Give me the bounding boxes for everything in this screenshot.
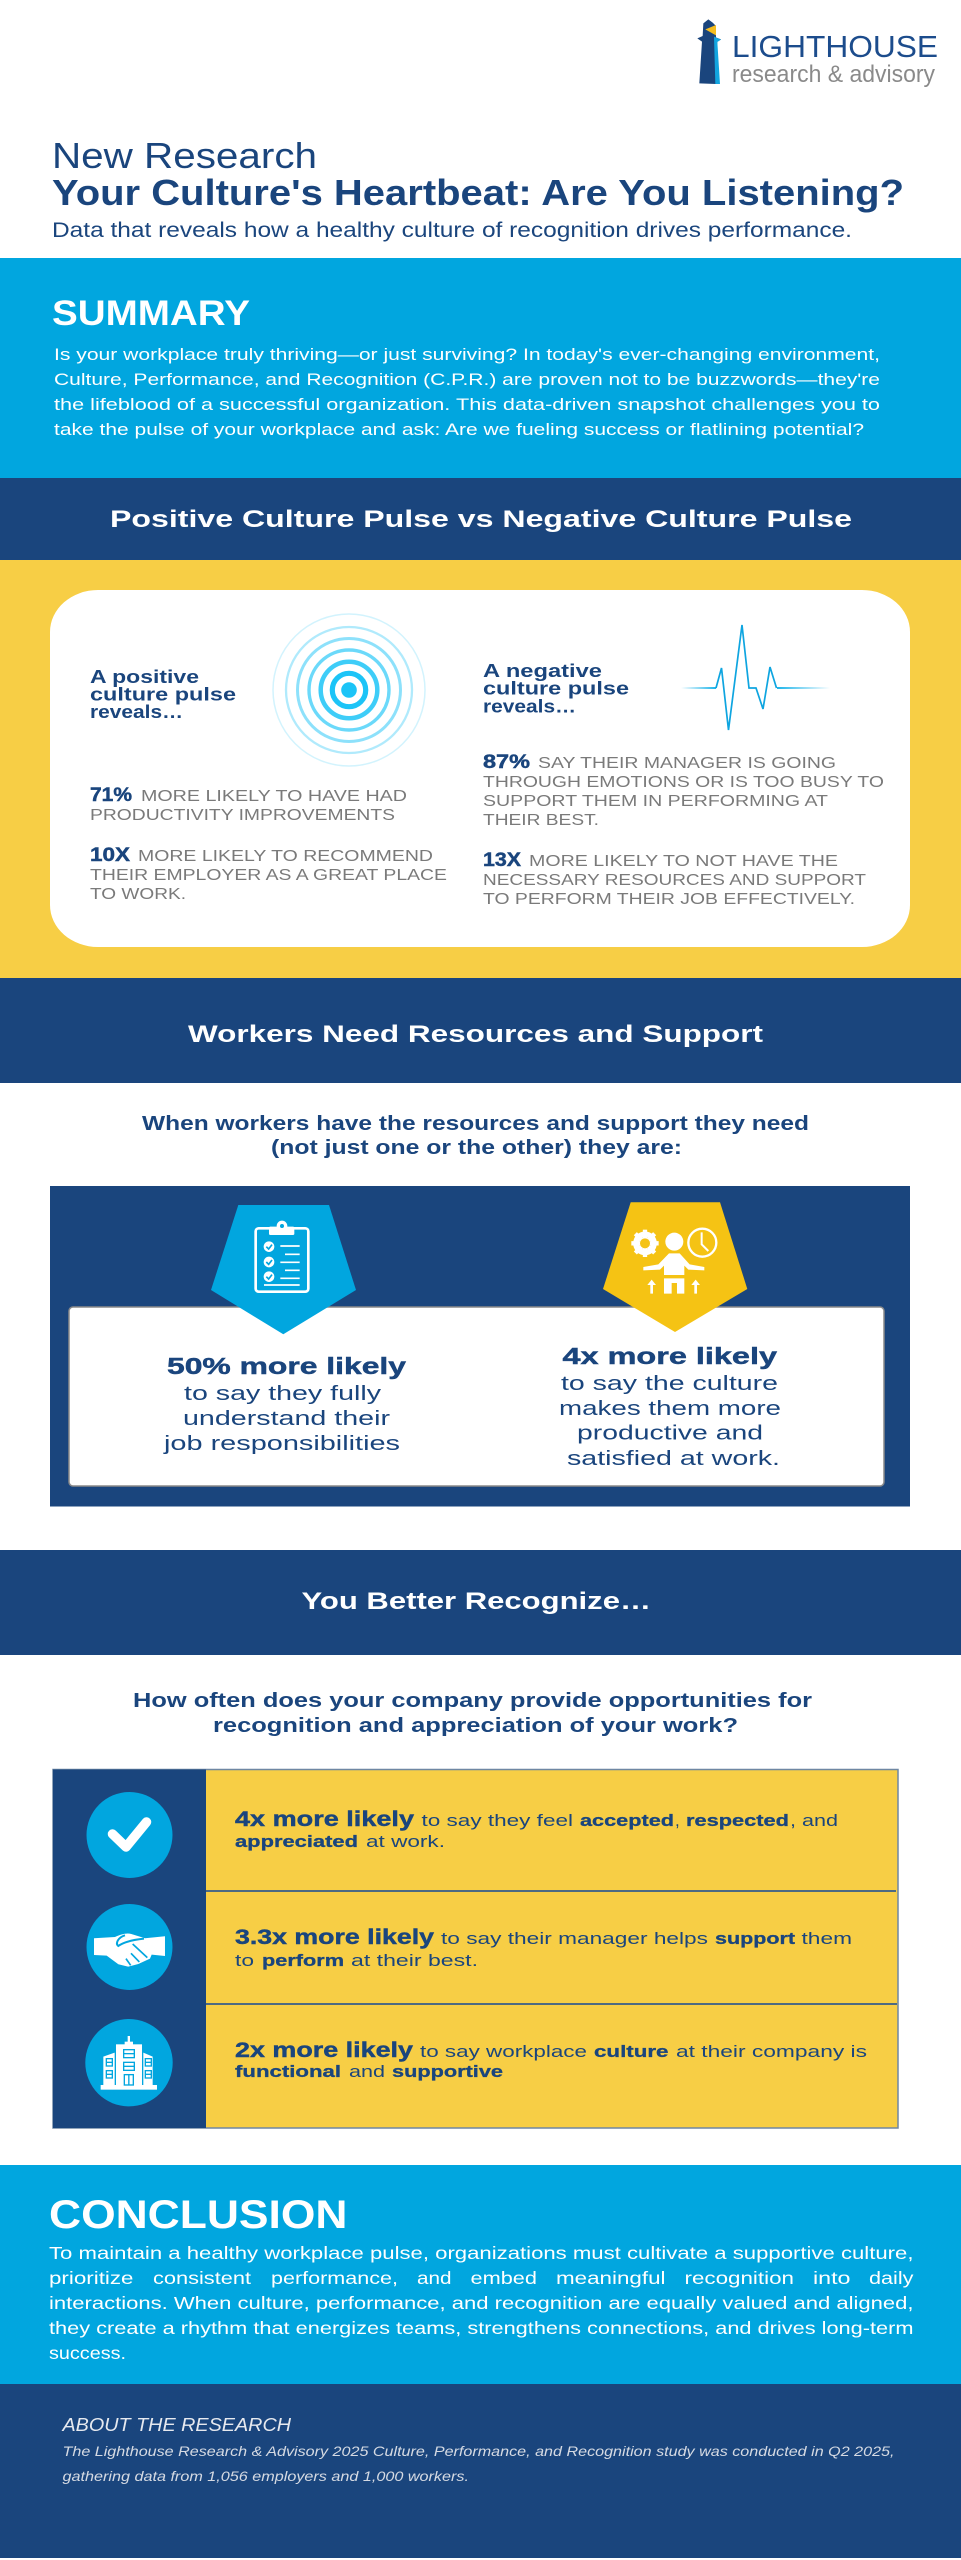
stat: 71%: 71% [90,785,132,806]
section band: positive vs negative pulse [0,478,961,560]
section heading: You Better Recognize… [302,1588,651,1615]
panel: summary [0,258,961,478]
panel: about the research [0,2384,961,2558]
row 2 text: support [715,1929,795,1948]
conclusion text: interactions. When culture, performance, and recognition are equally valued and aligned, [49,2293,914,2313]
conclusion text [49,2243,914,2363]
subheading: resources and support: When workers have the resources and support they need [142,1112,809,1135]
stat: 71% [90,785,407,824]
stat: 4x more likely: productive and [577,1422,763,1444]
stat: 13X: NECESSARY RESOURCES AND SUPPORT [483,872,867,889]
conclusion text: into [813,2268,850,2288]
stat: 71%: PRODUCTIVITY IMPROVEMENTS [90,807,395,824]
stat: 50% more likely: 50% more likely [167,1353,406,1379]
negative pulse heading [483,660,629,716]
icon: productive person badge [603,1202,747,1332]
positive pulse heading: A positive [90,666,199,687]
row 1 text: respected [686,1811,789,1830]
positive pulse heading [90,666,236,722]
stat: 50% more likely: to say they fully [184,1383,381,1405]
stat: 10X: MORE LIKELY TO RECOMMEND [138,848,433,865]
stat: 87%: 87% [483,752,530,773]
row 1 text: accepted [580,1811,674,1830]
row dividers [206,1890,896,1892]
eyebrow: New Research: New Research [52,135,317,176]
conclusion text: success. [49,2343,126,2363]
stat: 10X: 10X [90,845,130,866]
panel: resources and support stats [50,1186,910,1506]
panel: culture pulse comparison [0,560,961,978]
about text [62,2443,894,2484]
icon: lighthouse [697,19,721,84]
icon: concentric pulse rings [273,614,425,766]
negative pulse heading: A negative [483,660,602,681]
row 1 text: 4x more likely [235,1807,414,1831]
stat: 10X [90,845,447,903]
row 3 text: and [349,2062,385,2081]
panel: recognition table [53,1770,898,2128]
conclusion text: performance, [271,2268,398,2288]
stat: 50% more likely: understand their [183,1408,390,1430]
row 1 text: to say they feel [422,1811,573,1830]
stat: 4x more likely: 4x more likely [562,1343,777,1369]
stat: 87%: THEIR BEST. [483,812,599,829]
summary text: Is your workplace truly thriving—or just surviving? In today's ever-changing environment, [54,345,880,364]
subheading: recognition question: How often does your company provide opportunities for [133,1689,812,1712]
section heading: Workers Need Resources and Support [188,1021,763,1048]
stat: 4x more likely: to say the culture [561,1373,778,1395]
row 3 text: 2x more likely [235,2038,413,2062]
section band: workers need resources [0,978,961,1083]
stat: 13X [483,850,867,908]
stat: 87%: SAY THEIR MANAGER IS GOING [538,755,836,772]
negative pulse heading: culture pulse [483,678,629,698]
stat: 13X: TO PERFORM THEIR JOB EFFECTIVELY. [483,891,855,908]
panel: conclusion [0,2165,961,2384]
row 2 text: perform [262,1951,344,1970]
positive pulse heading: reveals… [90,701,183,722]
row 2 text: to [235,1951,254,1970]
conclusion text: they create a rhythm that energizes teams, strengthens connections, and drives long-term [49,2318,914,2338]
subheading: recognition question [133,1689,812,1737]
stat: 87%: THROUGH EMOTIONS OR IS TOO BUSY TO [483,774,884,791]
conclusion text: recognition [684,2268,794,2288]
row 2 text: at their best. [351,1951,478,1970]
row 1 text: , and [790,1811,838,1830]
stat: 87% [483,752,884,829]
icon: clipboard badge [211,1205,356,1334]
white inner card [69,1307,884,1486]
row 3 text: supportive [392,2062,503,2081]
row 2 text: to say their manager helps [441,1929,708,1948]
summary text: Culture, Performance, and Recognition (C.P.R.) are proven not to be buzzwords—they're [54,370,880,389]
row 1 text: at work. [366,1832,445,1851]
row 3 text [235,2038,867,2081]
stat: 50% more likely: job responsibilities [163,1433,400,1455]
row 3 text: culture [594,2042,668,2061]
icon: office building [85,2019,173,2106]
row 1 text: , [675,1811,680,1830]
row 3 text: functional [235,2062,341,2081]
about text: gathering data from 1,056 employers and 1,000 workers. [62,2468,469,2484]
icon: handshake [86,1904,172,1990]
stat: 13X: MORE LIKELY TO NOT HAVE THE [529,853,838,870]
icon: heartbeat line [681,625,830,730]
conclusion text: prioritize [49,2268,134,2288]
subheading: resources and support [142,1112,809,1159]
logo wordmark: LIGHTHOUSE [732,29,938,64]
stat: 13X: 13X [483,850,521,871]
subtitle: Data that reveals how a healthy culture of recognition drives performance. [52,218,852,242]
stat: 50% more likely [163,1353,406,1455]
positive pulse heading: culture pulse [90,684,236,704]
conclusion text: consistent [153,2268,251,2288]
row 3 text: at their company is [676,2042,867,2061]
stat: 4x more likely [559,1343,781,1470]
section band: you better recognize [0,1550,961,1655]
white card [50,590,910,947]
icon: check mark [86,1792,172,1878]
about text: The Lighthouse Research & Advisory 2025 Culture, Performance, and Recognition study was conducted in Q2 2025, [62,2443,894,2459]
summary text: the lifeblood of a successful organization. This data-driven snapshot challenges you to [54,395,880,414]
stat: 4x more likely: satisfied at work. [567,1448,780,1470]
about heading: ABOUT THE RESEARCH [61,2415,292,2435]
stat: 10X: THEIR EMPLOYER AS A GREAT PLACE [90,867,447,884]
row 1 text: appreciated [235,1832,358,1851]
row 2 text [235,1925,852,1970]
subheading: resources and support: (not just one or the other) they are: [271,1136,682,1159]
title block [52,135,904,242]
section heading: Positive Culture Pulse vs Negative Culture Pulse [110,506,852,533]
navy icon column [53,1770,206,2128]
negative pulse heading: reveals… [483,696,576,716]
summary text [54,345,880,439]
conclusion text: daily [869,2268,914,2288]
stat: 87%: SUPPORT THEM IN PERFORMING AT [483,793,829,810]
conclusion heading: CONCLUSION [49,2193,348,2237]
summary heading: SUMMARY [52,294,250,333]
title: Your Culture's Heartbeat: Are You Listening? [52,172,904,213]
conclusion text: To maintain a healthy workplace pulse, organizations must cultivate a supportive culture, [49,2243,914,2263]
summary text: take the pulse of your workplace and ask: Are we fueling success or flatlining potential? [54,420,864,439]
logo tagline: research & advisory [732,61,935,88]
row 1 text [235,1807,838,1851]
conclusion text: embed [470,2268,537,2288]
row 2 text: 3.3x more likely [235,1925,434,1949]
subheading: recognition question: recognition and appreciation of your work? [213,1714,738,1737]
stat: 10X: TO WORK. [90,886,186,903]
stat: 71%: MORE LIKELY TO HAVE HAD [141,788,407,805]
conclusion text: meaningful [556,2268,666,2288]
conclusion text: and [417,2268,452,2288]
row 2 text: them [802,1929,852,1948]
row 3 text: to say workplace [420,2042,587,2061]
logo: Lighthouse Research & Advisory [697,19,938,88]
stat: 4x more likely: makes them more [559,1398,781,1420]
